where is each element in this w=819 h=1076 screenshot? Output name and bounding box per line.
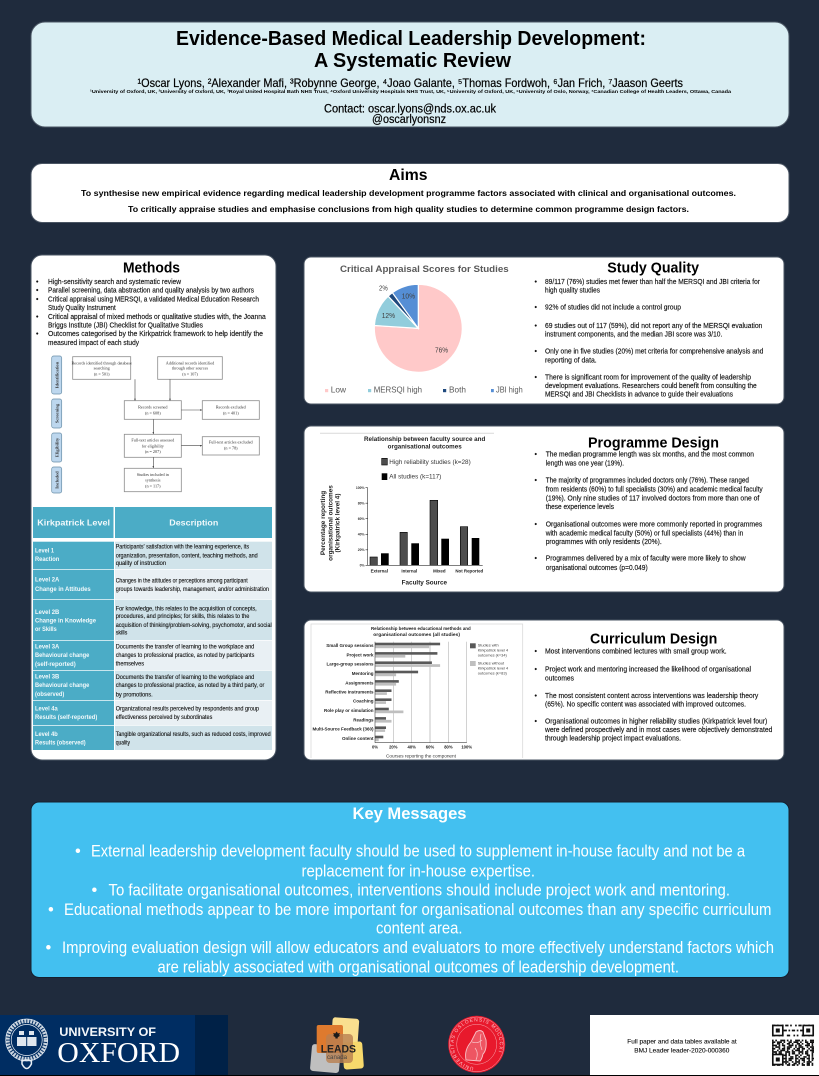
flow diagram: Records screened: [138, 404, 168, 410]
programme design bullets: with academic medical faculty (50%) or full specialists (44%) than in: [545, 530, 743, 537]
bar chart: educational methods: 20%: [389, 744, 398, 749]
study quality bullets: 92% of studies did not include a control group: [545, 305, 681, 312]
table: kirkpatrick levels: Changes in the attitudes or perceptions among participant: [116, 578, 248, 585]
contact: Contact: oscar.lyons@nds.ox.ac.uk: [324, 104, 496, 116]
table: kirkpatrick levels: Change in Knowledge: [35, 617, 96, 624]
study quality bullets: •: [534, 349, 538, 356]
bar chart: faculty source: High reliability studies (k=28): [389, 460, 471, 466]
curriculum design bullets: were defined prospectively and in most cases were objectively demonstrated: [544, 727, 772, 734]
table: kirkpatrick levels: Kirkpatrick Level: [37, 518, 110, 528]
table: kirkpatrick levels: Level 3A: [35, 644, 60, 651]
table: kirkpatrick levels: Organizational results perceived by respondents and group: [116, 706, 259, 713]
bar chart: educational methods: 0%: [372, 744, 378, 749]
methods bullets: Briggs Institute (JBI) Checklist for Qualitative Studies: [48, 323, 203, 330]
study quality bullets: 69 studies out of 117 (59%), did not report any of the MERSQI evaluation: [545, 323, 762, 330]
flow diagram: [52, 356, 259, 493]
bar chart: educational methods: Reflective Instruments: [325, 690, 374, 695]
bar chart: faculty source: Percentage reporting: [320, 491, 327, 555]
study quality bullets: •: [534, 279, 538, 286]
table: kirkpatrick levels: organization, presentation, content, teaching methods, and: [116, 552, 258, 559]
logo: university of oxford: [0, 1015, 228, 1075]
bar chart: educational methods: Multi-Source Feedback (360): [312, 727, 374, 732]
bar chart: faculty source: organisational outcomes: [388, 444, 462, 450]
flow diagram: Eligibility: [54, 437, 59, 457]
methods bullets: •: [36, 331, 39, 338]
table: kirkpatrick levels: changes to professional practice, as noted by participants: [116, 652, 254, 659]
bar chart: educational methods: Kirkpatrick level 4: [478, 666, 509, 671]
methods bullets: Critical appraisal of mixed methods or qualitative studies with, the Joanna: [48, 314, 266, 321]
bar chart: educational methods: outcomes (k=83): [478, 670, 507, 676]
logo: leads canada: canada: [327, 1055, 348, 1061]
pie chart: critical appraisal scores: 2%: [379, 284, 388, 293]
paper link text: BMJ Leader leader-2020-000360: [634, 1049, 730, 1055]
study quality bullets: There is significant room for improvement of the quality of leadership: [545, 375, 751, 382]
key messages text: •: [48, 901, 54, 919]
study quality bullets: development evaluations. Researchers could benefit from consulting the: [545, 383, 757, 390]
programme design bullets: •: [534, 522, 538, 529]
programme design bullets: •: [534, 452, 538, 459]
bar chart: educational methods: Courses reporting the component: [386, 754, 457, 758]
study quality bullets: •: [534, 375, 538, 382]
panel: title: [31, 22, 789, 127]
flow diagram: (n = 501): [94, 372, 110, 376]
programme design bullets: Organisational outcomes were more commonly reported in programmes: [546, 522, 763, 529]
bar chart: faculty source: External: [371, 569, 388, 574]
bar chart: educational methods: 60%: [426, 744, 434, 749]
bar chart: faculty source: All studies (k=117): [389, 475, 441, 481]
bar chart: educational methods: Studies with: [478, 642, 499, 647]
table: kirkpatrick levels: quality of instruction: [116, 560, 167, 567]
panel: aims: [31, 164, 789, 222]
curriculum design bullets: Most interventions combined lectures with small group work.: [545, 649, 727, 656]
aims text: [81, 188, 736, 214]
bar chart: faculty source: organisational outcomes: [327, 485, 334, 561]
pie chart: critical appraisal scores: 76%: [435, 346, 448, 355]
logo: leads canada: LEADS: [321, 1044, 356, 1056]
study quality bullets: 89/117 (76%) studies met fewer than half the MERSQI and JBI criteria for: [545, 279, 761, 286]
table: kirkpatrick levels: (observed): [35, 691, 64, 698]
table: kirkpatrick levels: Change in Attitudes: [35, 586, 91, 593]
table: kirkpatrick levels: Level 2A: [35, 577, 60, 584]
flow diagram: Screening: [54, 403, 59, 423]
table: kirkpatrick levels: Documents the transfer of learning to the workplace and: [116, 674, 255, 681]
key messages text: To facilitate organisational outcomes, interventions should include project work and mentoring.: [108, 882, 730, 900]
study quality bullets: •: [534, 305, 538, 312]
programme design bullets: The median programme length was six months, and the most common: [546, 452, 754, 459]
table: kirkpatrick levels: Level 3B: [35, 674, 60, 681]
curriculum design bullets: •: [534, 649, 538, 656]
logo: university of oslo seal: UNIVERSITAS OSLOENSIS MDCCCXI: [450, 1018, 504, 1070]
bar chart: faculty source: Internal: [401, 569, 417, 574]
aims text: To critically appraise studies and emphasise conclusions from high quality studies to determine common programme design factors.: [128, 204, 689, 214]
key messages text: [46, 843, 774, 976]
methods bullets: •: [36, 288, 39, 295]
bar chart: educational methods: 40%: [408, 744, 416, 749]
bar chart: faculty source: (Kirkpatrick level 4): [334, 494, 341, 552]
table: kirkpatrick levels: Participants' satisfaction with the learning experience, its: [116, 544, 249, 551]
key messages text: •: [46, 939, 52, 957]
curriculum design bullets: through leadership project impact evaluations.: [545, 736, 681, 743]
methods bullets: Critical appraisal using MERSQI, a validated Medical Education Research: [48, 297, 259, 304]
curriculum design bullets: •: [534, 667, 538, 674]
icon: qr code: [772, 1026, 814, 1065]
flow diagram: (n = 117): [145, 484, 161, 488]
flow diagram: Included: [54, 471, 59, 489]
flow diagram: Additional records identified: [166, 360, 215, 366]
programme design bullets: •: [534, 556, 538, 563]
contact: [324, 104, 496, 126]
curriculum design bullets: •: [534, 719, 538, 726]
programme design bullets: organisational outcomes (p=0.049): [546, 565, 648, 572]
bar chart: educational methods: organisational outcomes (all studies): [373, 632, 461, 637]
flow diagram: Identification: [54, 361, 59, 388]
pie chart: critical appraisal scores: Low: [331, 385, 347, 395]
bar chart: faculty source: 60%: [358, 517, 364, 521]
bar chart: faculty source: 20%: [358, 548, 364, 552]
bar chart: educational methods: 100%: [461, 744, 472, 749]
pie chart: critical appraisal scores: JBI high: [496, 385, 523, 395]
study quality bullets: instrument components, and the median JBI score was 3/10.: [545, 331, 722, 338]
table: kirkpatrick levels: For knowledge, this relates to the acquisition of concepts,: [116, 605, 257, 612]
bar chart: faculty source: 40%: [358, 533, 364, 537]
bar chart: educational methods: 80%: [444, 744, 453, 749]
curriculum design bullets: outcomes: [545, 675, 574, 682]
bar chart: educational methods: Small Group sessions: [326, 643, 374, 648]
table: kirkpatrick levels: Behavioural change: [35, 652, 90, 659]
flow diagram: synthesis: [145, 478, 161, 482]
table: kirkpatrick levels: procedures, and principles; for skills, this relates to the: [116, 613, 250, 620]
bar chart: faculty source: 80%: [358, 502, 364, 506]
study quality bullets: •: [534, 323, 538, 330]
flow diagram: Studies included in: [137, 472, 170, 477]
bar chart: educational methods: Role play or simulation: [324, 708, 374, 713]
pie chart: critical appraisal scores: 12%: [382, 311, 395, 320]
programme design bullets: from residents (60%) to full specialists (30%) and academic medical faculty: [546, 487, 763, 494]
methods bullets: Outcomes categorised by the Kirkpatrick framework to help identify the: [48, 331, 263, 338]
study quality bullets: high quality studies: [545, 288, 600, 295]
flow diagram: Records excluded: [216, 404, 247, 410]
flow diagram: (n = 401): [223, 410, 239, 416]
curriculum design bullets: [534, 649, 772, 743]
heading: curriculum design: Curriculum Design: [590, 631, 717, 648]
curriculum design bullets: •: [534, 693, 538, 700]
table: kirkpatrick levels: Level 4a: [35, 706, 58, 713]
table: kirkpatrick levels: or Skills: [35, 626, 57, 633]
bar chart: educational methods: Coaching: [353, 699, 374, 704]
methods bullets: Parallel screening, data abstraction and quality analysis by two authors: [48, 288, 254, 295]
table: kirkpatrick levels: changes to professional practice, as noted by a third party, or: [116, 682, 264, 689]
title: [176, 28, 646, 72]
contact: @oscarlyonsnz: [372, 114, 446, 126]
affiliations: ¹University of Oxford, UK, ²University of Oxford, UK, ³Royal United Hospital Bath NHS Trust, ⁴Oxford University Hospitals NHS Trust, UK, ⁵University of Oxford, UK, ⁶University of Oslo, Norway, ⁷Canadian College of Health Leaders, Ottawa, Canada: [90, 89, 732, 94]
paper link text: Full paper and data tables available at: [627, 1039, 737, 1045]
programme design bullets: The majority of programmes included doctors only (76%). These ranged: [546, 478, 749, 485]
flow diagram: searching: [94, 366, 111, 370]
paper link text: [627, 1039, 737, 1055]
bar chart: educational methods: outcomes (k=34): [478, 653, 507, 658]
pie chart: critical appraisal scores: Critical Appraisal Scores for Studies: [340, 264, 509, 275]
table: kirkpatrick levels: Results (self-reported): [35, 714, 97, 721]
bar chart: faculty source: Relationship between faculty source and: [364, 437, 486, 443]
table: kirkpatrick levels: Reaction: [35, 556, 59, 563]
key messages text: External leadership development faculty should be used to supplement in-house faculty and not be a: [91, 843, 746, 861]
methods bullets: •: [36, 279, 39, 286]
bar chart: educational methods: Project work: [346, 652, 374, 657]
table: kirkpatrick levels: effectiveness perceived by subordinates: [116, 714, 212, 721]
pie chart: critical appraisal scores: MERSQI high: [374, 385, 422, 395]
table: kirkpatrick levels: acquisition of thinking/problem-solving, psychomotor, and social: [116, 622, 272, 629]
bar chart: faculty source: 0%: [360, 564, 364, 568]
curriculum design bullets: Project work and mentoring increased the likelihood of organisational: [545, 667, 751, 674]
pie chart: critical appraisal scores: 10%: [402, 292, 415, 301]
bar chart: educational methods: [311, 624, 523, 758]
table: kirkpatrick levels: Results (observed): [35, 739, 86, 746]
flow diagram: (n = 608): [145, 410, 161, 416]
programme design bullets: (19%). Only nine studies of 117 involved doctors from more than one of: [546, 496, 759, 503]
flow diagram: Full-text articles excluded: [209, 440, 254, 444]
table: kirkpatrick levels: Level 4b: [35, 731, 58, 738]
panel: paper link and qr code: [590, 1015, 819, 1075]
table: kirkpatrick levels: (self-reported): [35, 661, 76, 668]
table: kirkpatrick levels: Description: [169, 518, 218, 528]
key messages text: •: [92, 882, 98, 900]
methods bullets: Study Quality Instrument: [48, 305, 116, 312]
bar chart: faculty source: Faculty Source: [402, 581, 448, 587]
title: Evidence-Based Medical Leadership Development:: [176, 28, 646, 50]
pie chart: critical appraisal scores: [325, 264, 523, 395]
aims text: To synthesise new empirical evidence regarding medical leadership development programme factors associated with clinical and organisational outcomes.: [81, 188, 736, 198]
programme design bullets: Programmes delivered by a mix of faculty were more likely to show: [546, 556, 747, 563]
methods bullets: [36, 279, 266, 347]
panel: methods: [31, 255, 276, 760]
pie chart: critical appraisal scores: Both: [449, 385, 466, 395]
study quality bullets: MERSQI and JBI Checklists in advance to guide their evaluations: [545, 392, 733, 399]
panel: study quality: [304, 257, 784, 404]
logo: leads canada: [310, 1017, 364, 1073]
flow diagram: (n = 207): [145, 449, 161, 454]
table: kirkpatrick levels: Tangible organizational results, such as reduced costs, improved: [116, 731, 271, 738]
heading: aims: Aims: [389, 167, 428, 184]
bar chart: educational methods: Online content: [342, 736, 374, 741]
study quality bullets: Only one in five studies (20%) met criteria for comprehensive analysis and: [545, 349, 763, 356]
bar chart: educational methods: Mentoring: [352, 671, 374, 676]
key messages text: content area.: [376, 919, 462, 937]
authors: ¹Oscar Lyons, ²Alexander Mafi, ³Robynne George, ⁴Joao Galante, ⁵Thomas Fordwoh, ⁶Jan Frich, ⁷Jaason Geerts: [138, 76, 683, 90]
bar chart: educational methods: Large-group sessions: [326, 662, 374, 667]
programme design bullets: programmes with only residents (20%).: [546, 539, 662, 546]
table: kirkpatrick levels: themselves: [116, 661, 144, 668]
flow diagram: through other sources: [172, 366, 209, 370]
bar chart: educational methods: Readings: [353, 717, 374, 722]
study quality bullets: [534, 279, 763, 399]
methods bullets: measured impact of each study: [48, 340, 139, 347]
table: kirkpatrick levels: Level 2B: [35, 609, 60, 616]
programme design bullets: •: [534, 478, 538, 485]
methods bullets: •: [36, 314, 39, 321]
bar chart: educational methods: Relationship between educational methods and: [371, 626, 471, 631]
bar chart: educational methods: Kirkpatrick level 4: [478, 648, 509, 652]
table: kirkpatrick levels: groups towards leadership, management, and/or administration: [116, 586, 269, 593]
heading: programme design: Programme Design: [588, 434, 719, 451]
key messages text: •: [75, 843, 81, 861]
curriculum design bullets: The most consistent content across interventions was leadership theory: [545, 693, 759, 700]
programme design bullets: [534, 452, 763, 572]
programme design bullets: these experience levels: [546, 504, 614, 511]
bar chart: educational methods: Assignments: [345, 680, 374, 685]
bar chart: faculty source: Mixed: [433, 569, 446, 574]
methods bullets: High-sensitivity search and systematic review: [48, 279, 182, 286]
heading: study quality: Study Quality: [607, 260, 700, 277]
flow diagram: Records identified through database: [72, 360, 132, 366]
table: kirkpatrick levels: Level 1: [35, 548, 54, 555]
table: kirkpatrick levels: Documents the transfer of learning to the workplace and: [116, 644, 255, 651]
key messages text: replacement for in-house expertise.: [302, 863, 535, 881]
table: kirkpatrick levels: quality: [116, 739, 131, 746]
panel: curriculum design: [304, 620, 784, 760]
heading: key messages: Key Messages: [352, 804, 466, 823]
panel: programme design: [304, 426, 784, 592]
heading: methods: Methods: [123, 260, 180, 277]
logo: university of oxford: UNIVERSITY OF: [59, 1027, 156, 1039]
logo: university of oxford: OXFORD: [57, 1037, 180, 1069]
curriculum design bullets: Organisational outcomes in higher reliability studies (Kirkpatrick level four): [545, 719, 767, 726]
curriculum design bullets: (65%). No specific content was associated with improved outcomes.: [545, 701, 746, 708]
table: kirkpatrick levels: Behavioural change: [35, 682, 90, 689]
key messages text: are reliably associated with organisational outcomes of leadership development.: [158, 958, 679, 976]
flow diagram: (n = 78): [224, 446, 238, 450]
table: kirkpatrick levels: [33, 507, 272, 750]
table: kirkpatrick levels: skills: [116, 630, 127, 637]
table: kirkpatrick levels: by promotions.: [116, 691, 153, 698]
programme design bullets: length was one year (19%).: [546, 461, 624, 468]
flow diagram: for eligibility: [142, 444, 165, 448]
bar chart: faculty source: [320, 433, 494, 587]
flow diagram: (n = 107): [182, 372, 198, 376]
title: A Systematic Review: [314, 50, 511, 72]
flow diagram: Full-text articles assessed: [131, 438, 175, 442]
bar chart: faculty source: Not Reported: [455, 569, 484, 574]
methods bullets: •: [36, 297, 39, 304]
panel: key messages: [31, 802, 789, 978]
study quality bullets: reporting of data.: [545, 357, 597, 364]
bar chart: educational methods: Studies without: [478, 660, 505, 665]
bar chart: faculty source: 100%: [356, 486, 364, 490]
